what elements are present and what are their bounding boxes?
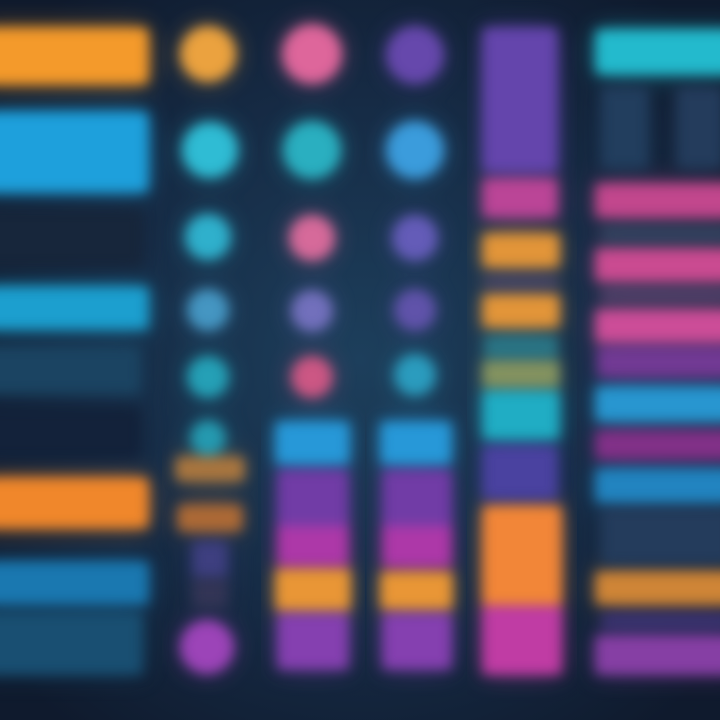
column 4: circles and stacked bar <box>381 27 452 669</box>
column 6: table rows <box>596 30 720 674</box>
column 5: tall stacked bar <box>483 28 561 674</box>
column 2: circles and bars <box>176 27 244 673</box>
column 1: horizontal bars <box>0 28 148 674</box>
column 3: circles and stacked bar <box>276 25 350 669</box>
